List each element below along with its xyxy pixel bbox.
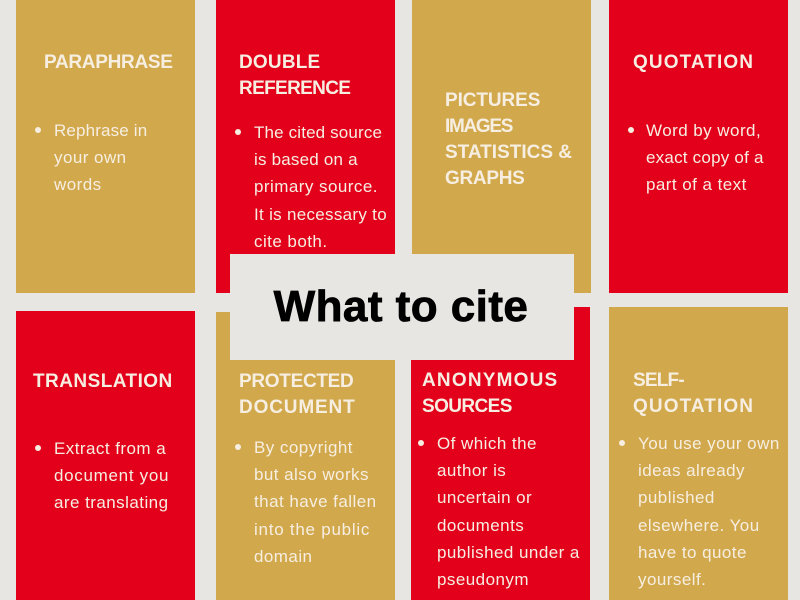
text: quotation: part of a text [646, 175, 747, 194]
bullet [35, 445, 41, 451]
panel: quotation [609, 0, 788, 293]
text: protected document: By copyright [254, 438, 353, 457]
text: protected document: domain [254, 547, 312, 566]
heading: paraphrase: PARAPHRASE [44, 52, 173, 73]
text: paraphrase [54, 121, 147, 194]
text: paraphrase: Rephrase in [54, 121, 147, 140]
heading: double reference: DOUBLE [239, 52, 320, 73]
text: double reference: cite both. [254, 232, 328, 251]
bullet [628, 127, 634, 133]
text: double reference: primary source. [254, 177, 378, 196]
text: self-quotation: published [638, 488, 715, 507]
text: translation [54, 439, 169, 512]
text: double reference [254, 123, 387, 251]
text: protected document: but also works [254, 465, 369, 484]
text: double reference: It is necessary to [254, 205, 387, 224]
panel: pictures images statistics graphs [412, 0, 591, 293]
text: translation: are translating [54, 493, 168, 512]
panel: protected document [216, 312, 395, 600]
heading: pictures images statistics graphs: GRAPHS [445, 168, 524, 189]
text: translation: document you [54, 466, 169, 485]
bullet [35, 127, 41, 133]
bullet [418, 440, 424, 446]
heading: self-quotation: QUOTATION [633, 396, 754, 417]
heading: pictures images statistics graphs: IMAGES [445, 116, 512, 137]
heading: pictures images statistics graphs: PICTURES [445, 90, 540, 111]
text: anonymous sources: pseudonym [437, 570, 529, 589]
heading: protected document: DOCUMENT [239, 397, 356, 418]
text: self-quotation: ideas already [638, 461, 745, 480]
text: quotation: exact copy of a [646, 148, 764, 167]
heading: quotation: QUOTATION [633, 52, 754, 73]
panel: self-quotation [609, 307, 788, 600]
heading: protected document [239, 371, 356, 418]
text: protected document: into the public [254, 520, 370, 539]
heading: double reference: REFERENCE [239, 78, 350, 99]
heading: anonymous sources: ANONYMOUS [422, 370, 558, 391]
text: self-quotation: yourself. [638, 570, 706, 589]
heading: translation: TRANSLATION [33, 371, 173, 392]
text: self-quotation: You use your own [638, 434, 780, 453]
text: anonymous sources: Of which the [437, 434, 537, 453]
heading: anonymous sources [422, 370, 558, 417]
text: anonymous sources: documents [437, 516, 524, 535]
text: quotation: Word by word, [646, 121, 761, 140]
text: self-quotation: elsewhere. You [638, 516, 760, 535]
text: quotation [646, 121, 764, 194]
text: anonymous sources: published under a [437, 543, 580, 562]
heading: double reference [239, 52, 350, 99]
text: anonymous sources [437, 434, 580, 589]
panel: anonymous sources [411, 307, 590, 600]
text: translation: Extract from a [54, 439, 166, 458]
heading: protected document: PROTECTED [239, 371, 353, 392]
text: self-quotation: have to quote [638, 543, 747, 562]
text: protected document: that have fallen [254, 492, 377, 511]
text: protected document [254, 438, 377, 566]
panel: translation [16, 311, 195, 600]
bullet [235, 129, 241, 135]
heading: self-quotation [633, 370, 754, 417]
text: anonymous sources: author is [437, 461, 506, 480]
heading: self-quotation: SELF- [633, 370, 684, 391]
panel: paraphrase [16, 0, 195, 293]
text: paraphrase: words [54, 175, 102, 194]
text: anonymous sources: uncertain or [437, 488, 532, 507]
text: self-quotation [638, 434, 780, 589]
bullet [235, 444, 241, 450]
text: paraphrase: your own [54, 148, 127, 167]
heading: anonymous sources: SOURCES [422, 396, 512, 417]
heading: pictures images statistics graphs [445, 90, 572, 189]
text: double reference: The cited source [254, 123, 382, 142]
panel: double reference [216, 0, 395, 293]
title: What to cite [274, 282, 528, 331]
bullet [619, 440, 625, 446]
heading: pictures images statistics graphs: STATISTICS & [445, 142, 572, 163]
title [230, 254, 574, 360]
text: double reference: is based on a [254, 150, 358, 169]
